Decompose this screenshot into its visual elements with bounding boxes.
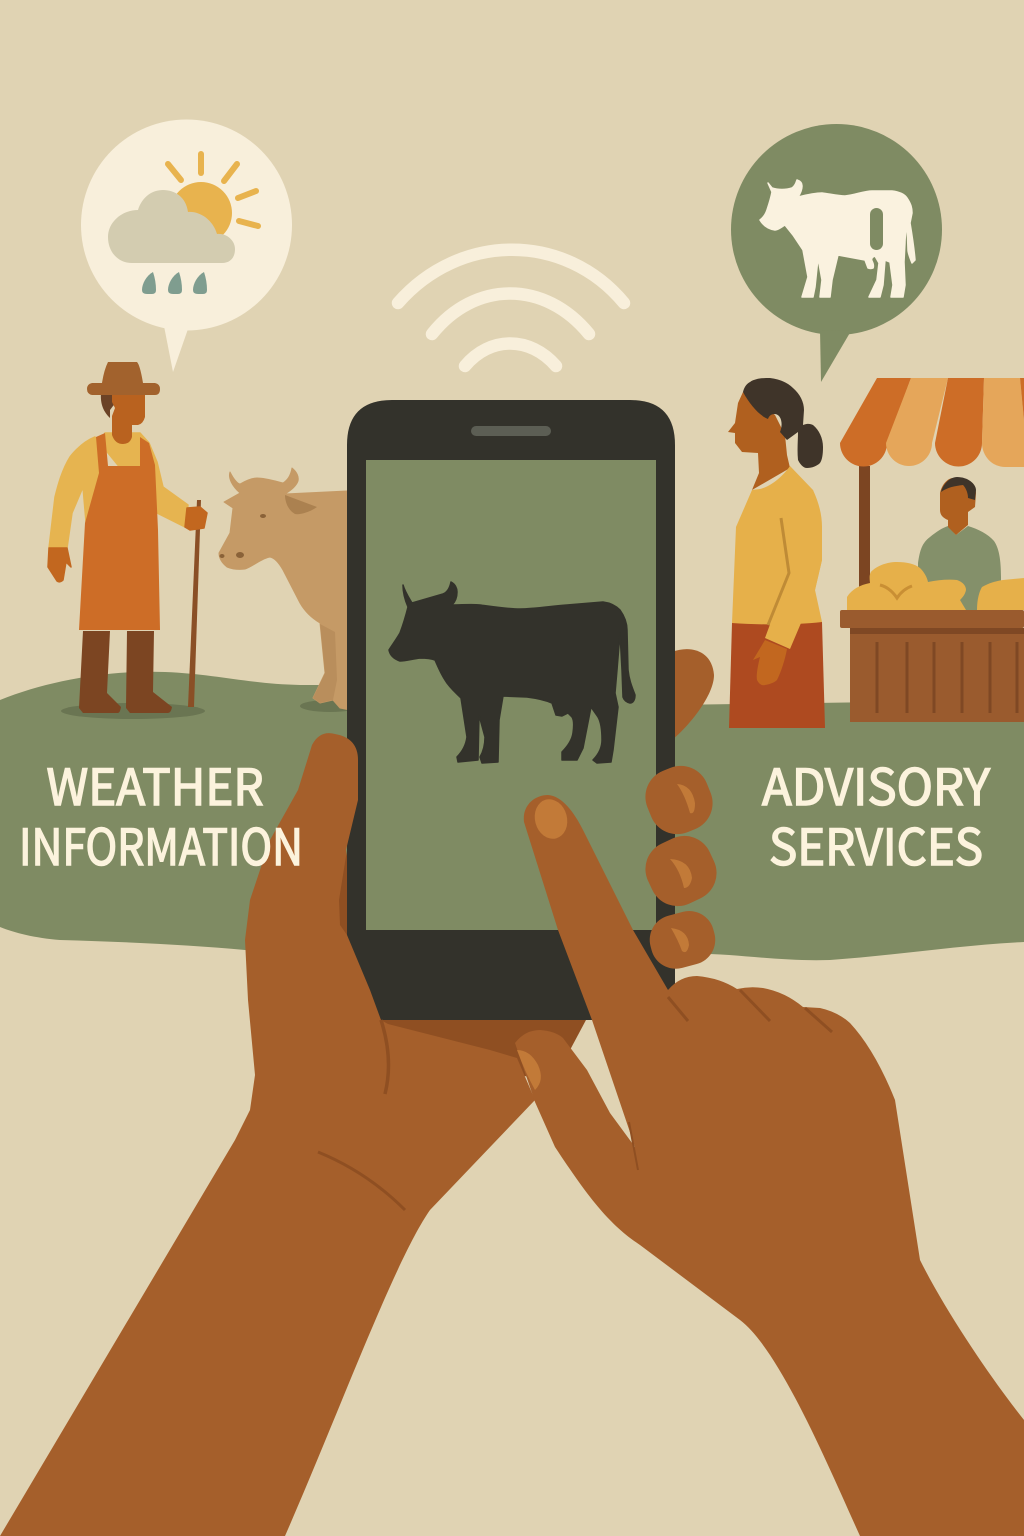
- woman hand: [753, 640, 787, 685]
- ground: right green hill: [670, 700, 1024, 960]
- label: advisory services: SERVICES: [769, 808, 983, 880]
- label: weather information: INFORMATION: [19, 808, 303, 880]
- farmer neck and head: [112, 392, 145, 444]
- farmer apron: [79, 433, 160, 630]
- vendor hair: [941, 477, 976, 500]
- farmer figure: [48, 362, 207, 719]
- stall pole: [859, 466, 870, 591]
- speech bubble: weather: [81, 120, 292, 372]
- right hand with pointing finger: [515, 795, 1024, 1536]
- icon: white cow: [760, 180, 915, 297]
- woman customer: [728, 378, 825, 728]
- shadow of palm under phone: [381, 1020, 586, 1080]
- icon: rain cloud: [108, 190, 235, 263]
- label: advisory services: [762, 748, 990, 880]
- beige cow behind phone: [219, 468, 360, 712]
- farmer shirt and arms: [49, 433, 188, 548]
- speech bubble: livestock advisory: [731, 124, 942, 382]
- stall table: [840, 610, 1024, 722]
- thumb shadow against phone: [339, 850, 347, 935]
- woman blouse: [732, 466, 822, 624]
- phone screen: [366, 460, 656, 930]
- label: weather information: [19, 748, 303, 880]
- stall awning: [840, 378, 1024, 467]
- label: weather information: WEATHER: [46, 748, 264, 820]
- fingertips gripping phone: [636, 757, 726, 974]
- farmer hands: [48, 507, 207, 582]
- icon: rain drops: [142, 272, 207, 294]
- left palm crease: [318, 1152, 405, 1210]
- woman hair and ponytail: [743, 378, 823, 468]
- label: advisory services: ADVISORY: [762, 748, 990, 820]
- woman sleeve: [765, 490, 822, 649]
- left hand: [0, 733, 535, 1536]
- farmer hair: [101, 392, 116, 418]
- icon: sun with rays: [168, 154, 258, 244]
- farmer hat: [87, 362, 160, 395]
- cow flank marking: [870, 208, 883, 250]
- farmer legs and boots: [79, 631, 172, 713]
- market stall: [840, 378, 1024, 722]
- wifi signal arcs: [398, 250, 624, 366]
- knuckle creases: [668, 990, 832, 1032]
- left hand back fingertip: [672, 649, 714, 740]
- phone speaker: [471, 426, 551, 436]
- woman head and neck: [728, 392, 790, 490]
- smartphone: [347, 400, 675, 1020]
- left thumb crease: [381, 1020, 388, 1094]
- index fingernail: [530, 796, 572, 842]
- ground: left green hill: [0, 672, 360, 952]
- vendor head: [940, 478, 976, 535]
- icon: dark cow on screen: [389, 582, 635, 763]
- vendor body: [918, 526, 1001, 610]
- woman skirt: [729, 622, 825, 728]
- staff: [188, 500, 201, 707]
- thumb crease and nail: [517, 1050, 638, 1170]
- bread loaves: [847, 562, 1024, 610]
